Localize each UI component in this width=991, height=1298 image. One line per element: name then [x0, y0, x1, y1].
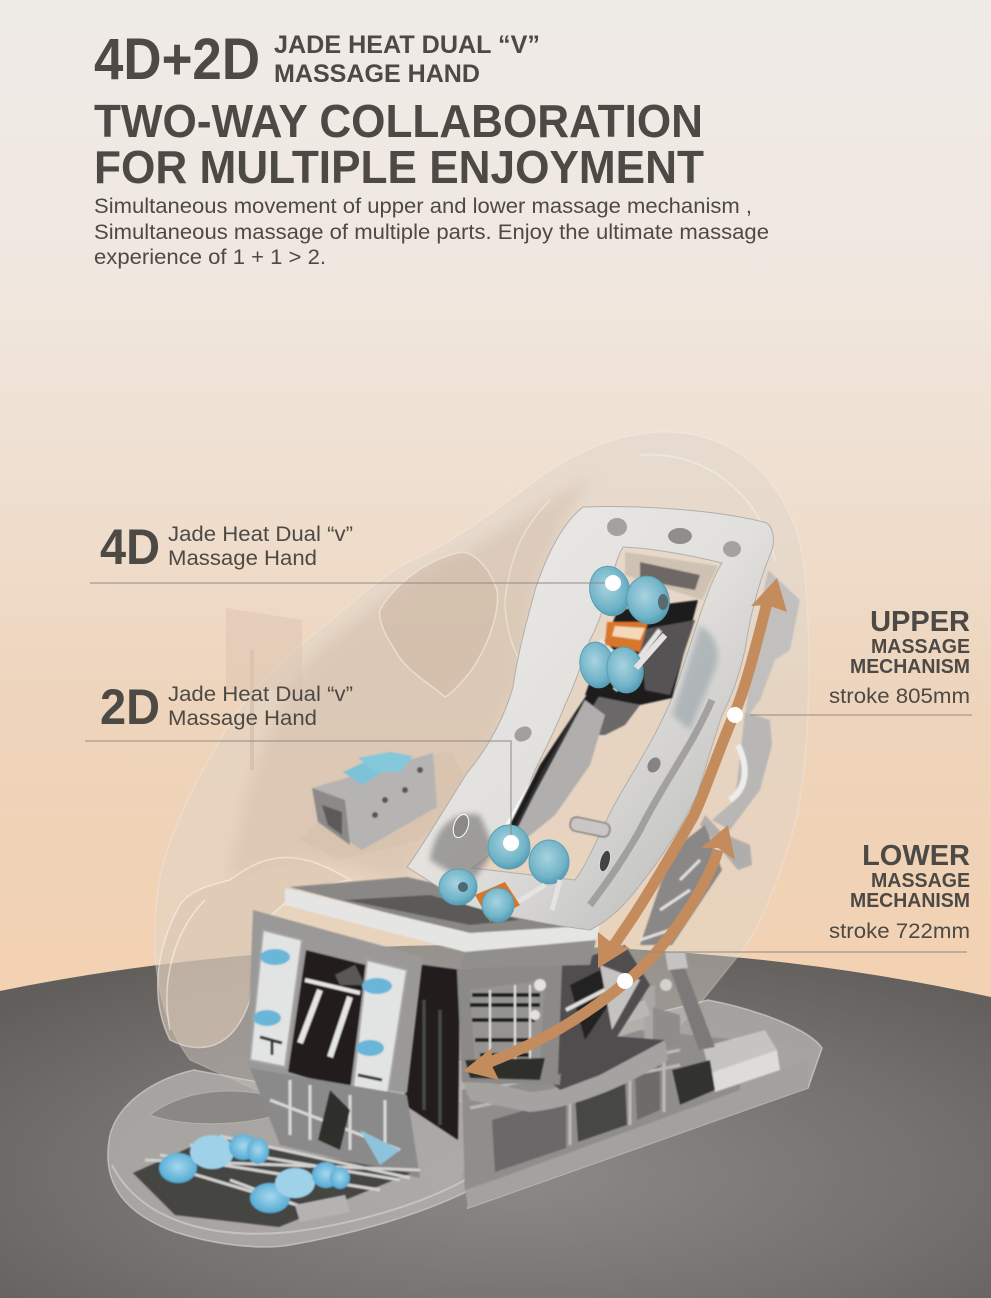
lower stroke double arrow	[463, 825, 735, 1080]
inner mechanism	[495, 552, 800, 945]
upper 4D rollers	[584, 562, 636, 620]
callout: 4D massage hand	[90, 519, 621, 591]
side cushion	[380, 552, 498, 697]
metal back frame	[407, 507, 773, 930]
metal shading	[430, 814, 495, 885]
round grey table surface	[0, 945, 991, 1298]
floating side massage module	[312, 752, 437, 850]
callout: 4D massage hand: Massage Hand	[168, 547, 317, 570]
description text: experience of 1 + 1 > 2.	[94, 245, 326, 269]
description text: Simultaneous movement of upper and lower massage mechanism ,	[94, 194, 752, 218]
callout: upper massage mechanism	[727, 606, 972, 723]
vertical post and bracket	[643, 985, 655, 1052]
upper arm right mechanism	[745, 570, 800, 720]
callout: 2D massage hand: 2D	[100, 679, 160, 735]
angled rear leg	[666, 955, 715, 1050]
blue airbags	[260, 949, 290, 965]
callout: lower massage mechanism	[617, 840, 970, 989]
heading: two-way collaboration: TWO-WAY COLLABORATION	[94, 95, 703, 147]
callout: lower massage mechanism: stroke 722mm	[829, 920, 970, 943]
upper stroke double arrow	[598, 578, 787, 968]
translucent massage chair shell	[155, 432, 809, 1110]
callout: 4D massage hand: Jade Heat Dual “v”	[168, 523, 353, 546]
callout: 4D massage hand: 4D	[100, 519, 160, 575]
callout: 2D massage hand: Jade Heat Dual “v”	[168, 683, 353, 706]
shell inner darker back area	[228, 480, 590, 880]
description text	[94, 194, 769, 269]
foot end rail and cylinder	[703, 1030, 777, 1073]
callout: upper massage mechanism: MECHANISM	[850, 656, 970, 678]
ghost side panel	[226, 608, 302, 770]
callout: upper massage mechanism: UPPER	[870, 606, 970, 638]
callout: upper massage mechanism: MASSAGE	[871, 636, 970, 658]
heading: 4D+2D: MASSAGE HAND	[274, 60, 480, 88]
callout: lower massage mechanism: MASSAGE	[871, 870, 970, 892]
seat support and rear mechanical frame	[460, 952, 780, 1190]
right calf airbag panel	[352, 960, 407, 1100]
orange motor, upper	[605, 622, 648, 652]
translucent base shell	[108, 1000, 822, 1247]
heading: 4D+2D: JADE HEAT DUAL “V”	[274, 31, 540, 59]
ottoman leg massager	[247, 910, 423, 1178]
left calf airbag panel	[250, 930, 302, 1067]
heading: two-way collaboration	[94, 95, 704, 193]
heading: 4D+2D	[94, 27, 540, 92]
callout: upper massage mechanism: stroke 805mm	[829, 685, 970, 708]
seat pan	[460, 1040, 668, 1112]
heading: 4D+2D: 4D+2D	[94, 27, 260, 92]
callout: lower massage mechanism: LOWER	[862, 840, 970, 872]
slots and bolts	[450, 812, 472, 840]
lower 2D rollers	[488, 825, 530, 869]
seat top plate	[285, 877, 600, 968]
heading: two-way collaboration: FOR MULTIPLE ENJOYMENT	[94, 141, 704, 193]
callout: 2D massage hand: Massage Hand	[168, 707, 317, 730]
description text: Simultaneous massage of multiple parts. Enjoy the ultimate massage	[94, 220, 769, 244]
foot roller massager	[133, 1134, 420, 1227]
massage rollers	[439, 562, 674, 922]
callout: lower massage mechanism: MECHANISM	[850, 890, 970, 912]
motor box	[405, 945, 672, 1140]
callout: 2D massage hand	[85, 679, 519, 851]
